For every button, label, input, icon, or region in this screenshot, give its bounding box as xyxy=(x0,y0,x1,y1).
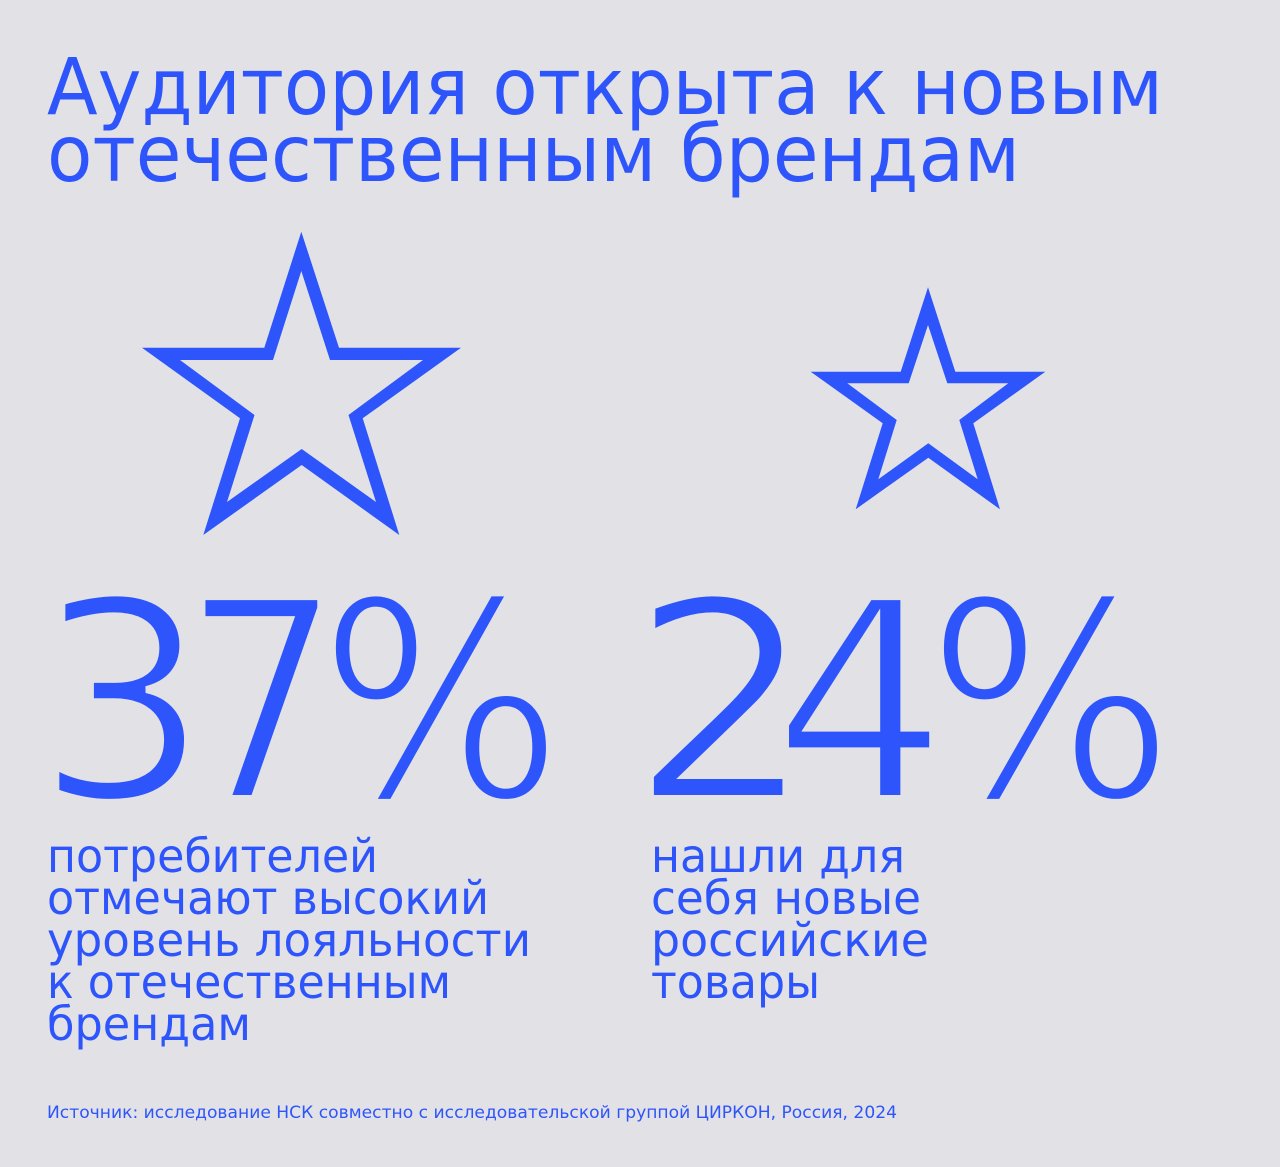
description: 37%: уровень лояльности xyxy=(47,913,531,967)
source note: Источник: исследование НСК совместно с исследовательской группой ЦИРКОН, Россия, 2024 xyxy=(47,1103,897,1123)
description: 37%: отмечают высокий xyxy=(47,871,489,925)
description: 24% xyxy=(651,829,929,1009)
description: 37% xyxy=(47,829,531,1051)
description: 24%: себя новые xyxy=(651,871,921,925)
title: Аудитория открыта к новым xyxy=(47,43,1163,133)
description: 37%: к отечественным xyxy=(47,955,451,1009)
statistic: 24% xyxy=(629,541,1175,864)
description: 24%: нашли для xyxy=(651,829,905,883)
description: 24%: товары xyxy=(651,955,820,1009)
description: 24%: российские xyxy=(651,913,929,967)
title: отечественным брендам xyxy=(47,110,1020,200)
statistic: 37%: 3 xyxy=(35,541,209,864)
description: 37%: брендам xyxy=(47,997,251,1051)
statistic: 37% xyxy=(35,541,563,865)
statistic: 24%: % xyxy=(926,541,1175,864)
statistic: 37%: % xyxy=(318,543,563,865)
description: 37%: потребителей xyxy=(47,829,378,883)
icon: small star xyxy=(811,287,1045,509)
statistic: 24%: 4 xyxy=(772,542,948,864)
title xyxy=(47,43,1163,200)
icon: large star xyxy=(142,232,461,535)
statistic: 24%: 2 xyxy=(629,542,816,864)
statistic: 37%: 7 xyxy=(182,542,342,864)
